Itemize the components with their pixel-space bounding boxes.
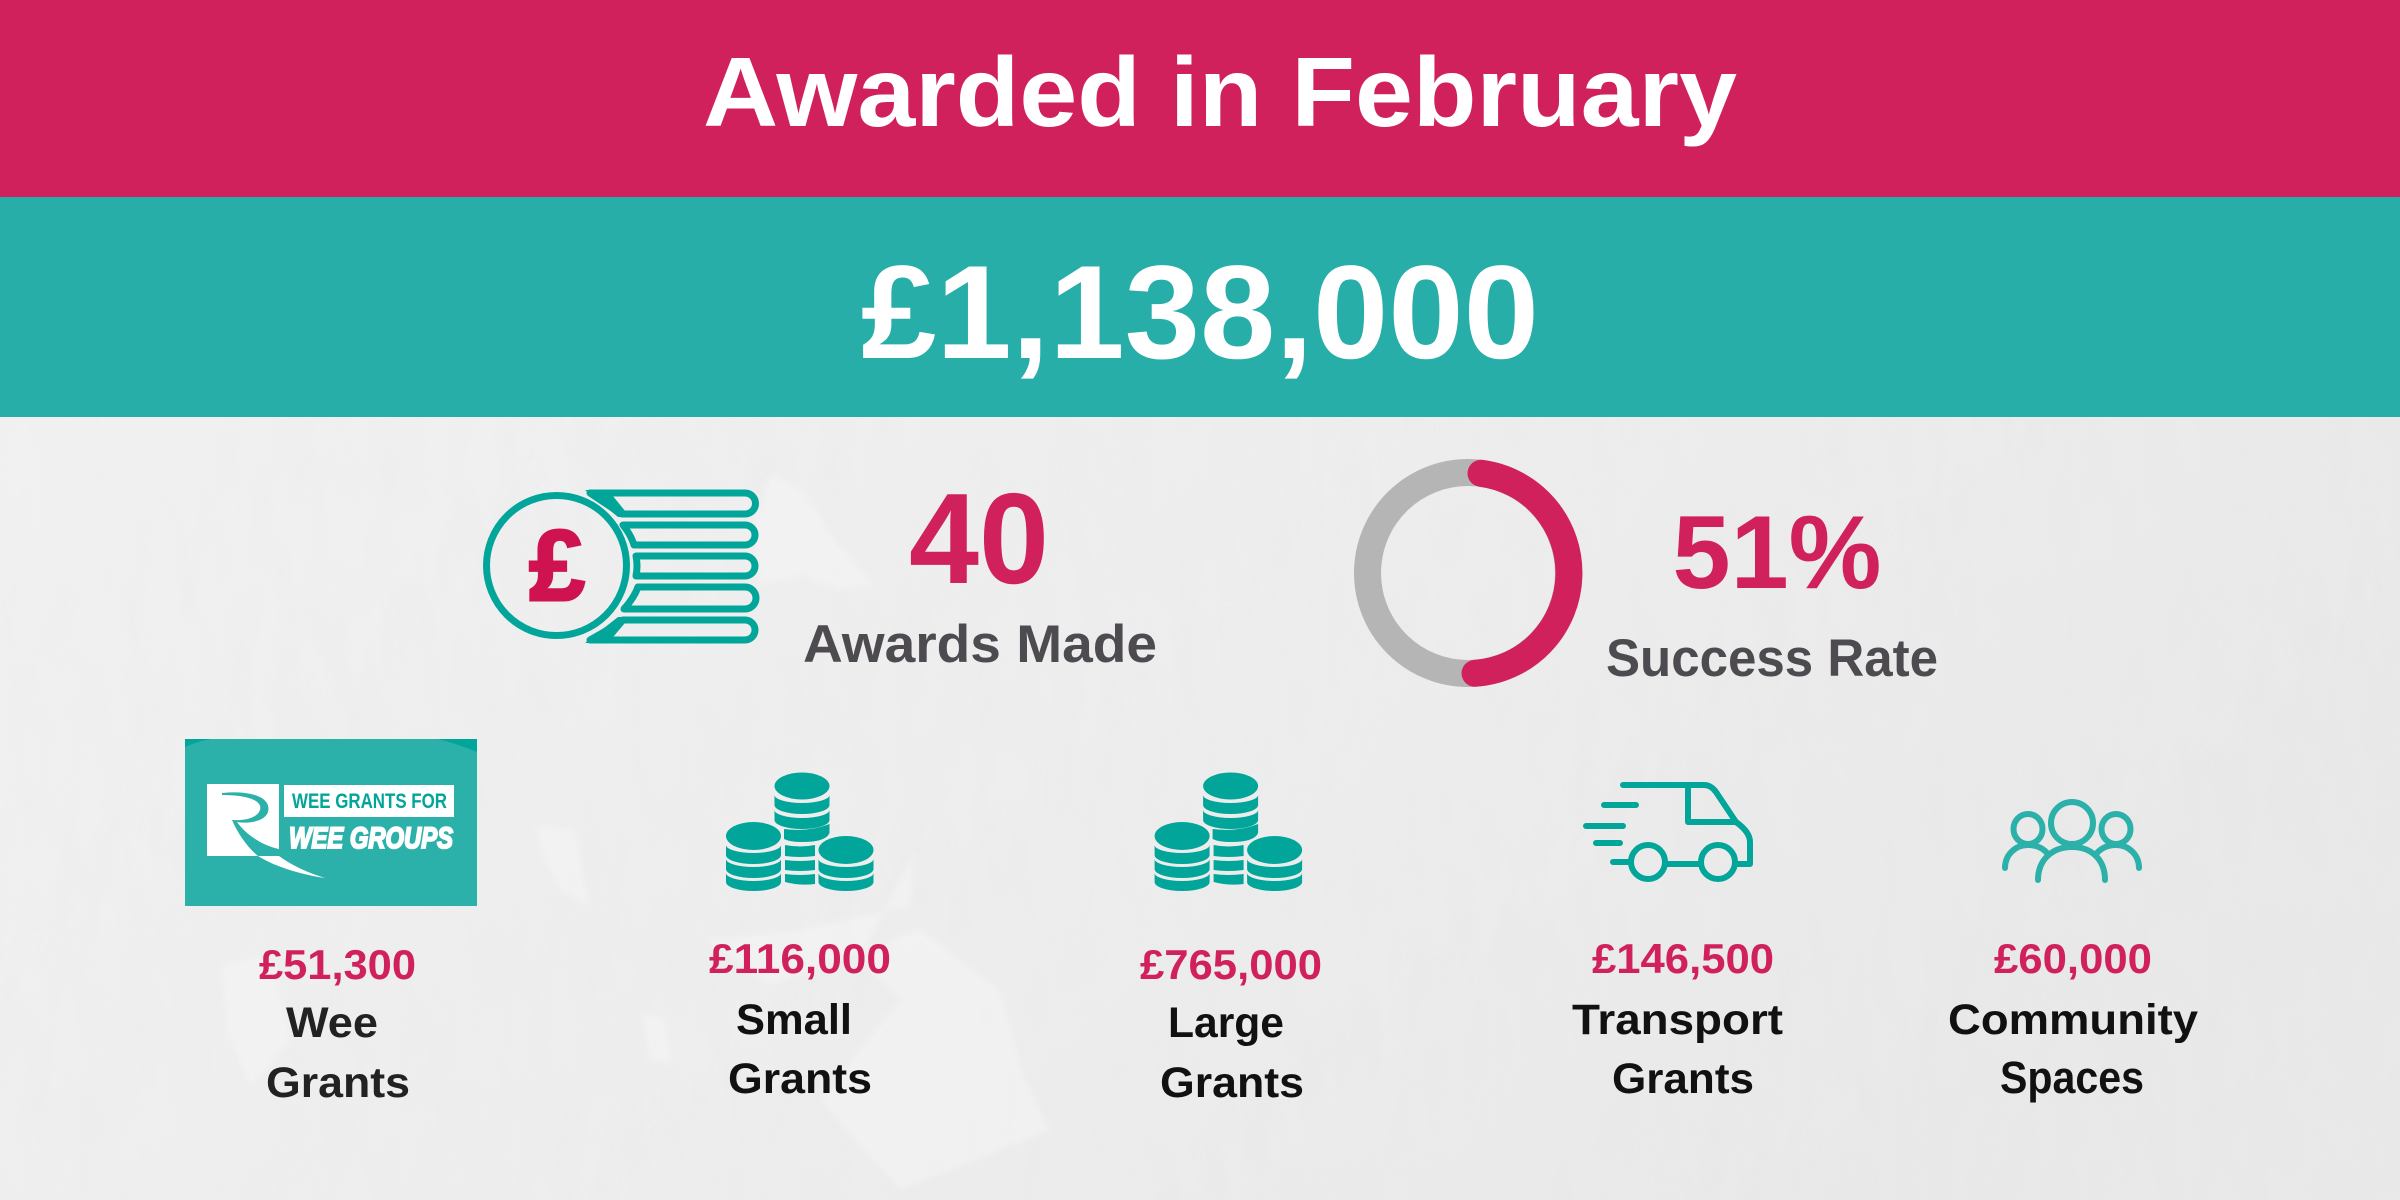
grant: Small Grants: Grants bbox=[728, 1055, 872, 1103]
grant: Small Grants bbox=[709, 935, 891, 1103]
label: Success Rate: Success Rate bbox=[1606, 629, 1938, 688]
chart: success rate donut bbox=[1368, 472, 1569, 674]
grant: Wee Grants: £51,300 bbox=[259, 941, 416, 988]
grant: Large Grants: Large bbox=[1168, 999, 1284, 1047]
icon: people bbox=[2005, 802, 2139, 880]
grant: Transport Grants: Transport bbox=[1572, 996, 1783, 1044]
label: Awards Made: Awards Made bbox=[803, 615, 1157, 674]
stat: success rate bbox=[1606, 495, 1938, 688]
grant: Transport Grants bbox=[1572, 935, 1783, 1103]
grant: Community Spaces: Community bbox=[1948, 996, 2198, 1044]
title banner bbox=[0, 0, 2400, 197]
number: 51%: 51% bbox=[1672, 495, 1882, 611]
total amount banner bbox=[0, 197, 2400, 417]
grant: Community Spaces: £60,000 bbox=[1994, 935, 2152, 982]
grant: Wee Grants: Wee bbox=[286, 999, 378, 1047]
icon: coin stack with pound sign: £ bbox=[529, 510, 585, 622]
icon: coin stack with pound sign bbox=[486, 490, 756, 643]
grant: Large Grants: £765,000 bbox=[1140, 941, 1322, 988]
grant: Wee Grants: Grants bbox=[266, 1059, 410, 1107]
grant: Small Grants: Small bbox=[736, 996, 852, 1044]
grant: Small Grants: £116,000 bbox=[709, 935, 891, 982]
logo: Wee Grants for Wee Groups: WEE GRANTS FOR bbox=[292, 790, 447, 813]
grant: Wee Grants bbox=[259, 941, 416, 1107]
grant: Transport Grants: £146,500 bbox=[1592, 935, 1774, 982]
logo: Wee Grants for Wee Groups: WEE GROUPS bbox=[289, 822, 453, 855]
grant: Community Spaces bbox=[1948, 935, 2198, 1103]
stat: awards made bbox=[803, 467, 1157, 674]
grant: Transport Grants: Grants bbox=[1612, 1055, 1754, 1103]
total amount: £1,138,000 bbox=[861, 239, 1539, 387]
grant: Large Grants: Grants bbox=[1160, 1059, 1304, 1107]
number: 40: 40 bbox=[909, 467, 1049, 611]
grant: Community Spaces: Spaces bbox=[2000, 1052, 2144, 1103]
icon: delivery van bbox=[1586, 785, 1750, 879]
grant: Large Grants bbox=[1140, 941, 1322, 1107]
title: Awarded in February bbox=[703, 37, 1737, 147]
icon: coins large grants bbox=[1155, 772, 1302, 891]
icon: coins small grants bbox=[726, 772, 874, 891]
textured paper background bbox=[0, 416, 2400, 1200]
logo: Wee Grants for Wee Groups bbox=[185, 739, 477, 906]
